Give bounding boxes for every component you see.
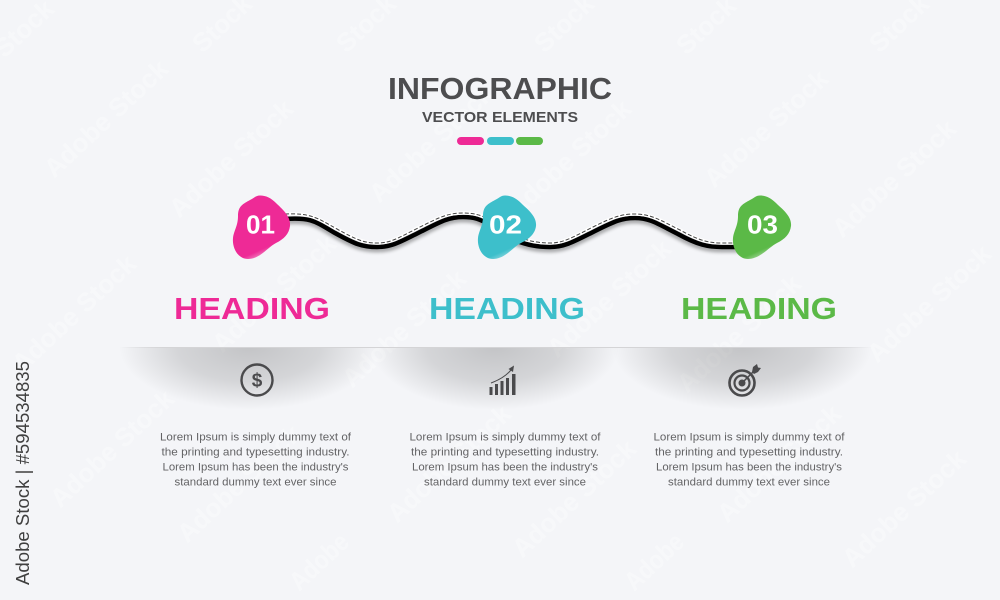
body text 02: the printing and typesetting industry.	[411, 446, 599, 458]
icon: growth chart	[490, 366, 516, 395]
watermark pattern: Adobe Stock	[506, 433, 642, 563]
subtitle: VECTOR ELEMENTS	[422, 109, 578, 126]
step 03 badge	[733, 196, 791, 259]
watermark pattern: Adobe Stock	[363, 78, 499, 208]
icon: dollar coin: $	[252, 370, 263, 392]
step 02 badge	[478, 196, 536, 259]
watermark pattern: Adobe Stock	[698, 63, 834, 193]
watermark pattern: Adobe Stock	[861, 238, 997, 368]
body text 03: standard dummy text ever since	[668, 476, 830, 488]
body text 01: Lorem Ipsum is simply dummy text of	[160, 432, 352, 444]
watermark pattern: Adobe Stock	[38, 53, 174, 183]
watermark pattern: Adobe Stock	[826, 113, 962, 243]
infographic canvas	[16, 78, 866, 585]
heading 02: HEADING	[429, 291, 585, 326]
step 01 badge	[233, 196, 290, 259]
watermark pattern: Adobe Stock	[336, 263, 472, 393]
watermark pattern: Adobe Stock	[836, 443, 972, 573]
colour pills	[457, 137, 543, 145]
body text 01: the printing and typesetting industry.	[162, 446, 350, 458]
title block	[388, 71, 612, 145]
watermark pattern: Adobe Stock	[381, 398, 517, 528]
watermark pattern: Adobe Stock	[711, 398, 847, 528]
heading 01: HEADING	[174, 291, 330, 326]
watermark pattern: Adobe Stock	[671, 268, 807, 398]
body text 03: the printing and typesetting industry.	[655, 446, 843, 458]
icon: target with arrow	[730, 364, 761, 396]
watermark pattern: Adobe Stock	[541, 233, 677, 363]
body text 02: standard dummy text ever since	[424, 476, 586, 488]
watermark pattern: Adobe Stock	[206, 228, 342, 358]
watermark pattern: Adobe Stock	[171, 418, 307, 548]
body text 03	[654, 432, 846, 488]
body text 02: Lorem Ipsum has been the industry's	[412, 462, 599, 474]
watermark pattern: Adobe	[618, 527, 690, 596]
step 02 badge: 02	[489, 212, 522, 240]
watermark pattern: Adobe	[283, 527, 355, 596]
watermark pattern: Adobe Stock	[501, 93, 637, 223]
body text 01: standard dummy text ever since	[174, 476, 336, 488]
body text 03: Lorem Ipsum has been the industry's	[656, 462, 843, 474]
body text 01: Lorem Ipsum has been the industry's	[162, 462, 349, 474]
drop shadows under the heading band	[126, 347, 866, 402]
watermark pattern: Adobe Stock	[163, 93, 299, 223]
body text 02	[410, 432, 602, 488]
body text 01	[160, 432, 352, 488]
icon: dollar coin	[242, 364, 272, 396]
watermark pattern: Adobe Stock	[44, 383, 180, 513]
step 03 badge: 03	[747, 212, 778, 240]
stock image id, vertical: Adobe Stock | #594534835	[12, 361, 33, 585]
title: INFOGRAPHIC	[388, 71, 612, 106]
body text 03: Lorem Ipsum is simply dummy text of	[654, 432, 846, 444]
winding road connecting the steps	[285, 213, 740, 249]
step 01 badge: 01	[246, 212, 275, 240]
body text 02: Lorem Ipsum is simply dummy text of	[410, 432, 602, 444]
heading 03: HEADING	[681, 291, 837, 326]
watermark pattern: Adobe Stock	[6, 248, 142, 378]
